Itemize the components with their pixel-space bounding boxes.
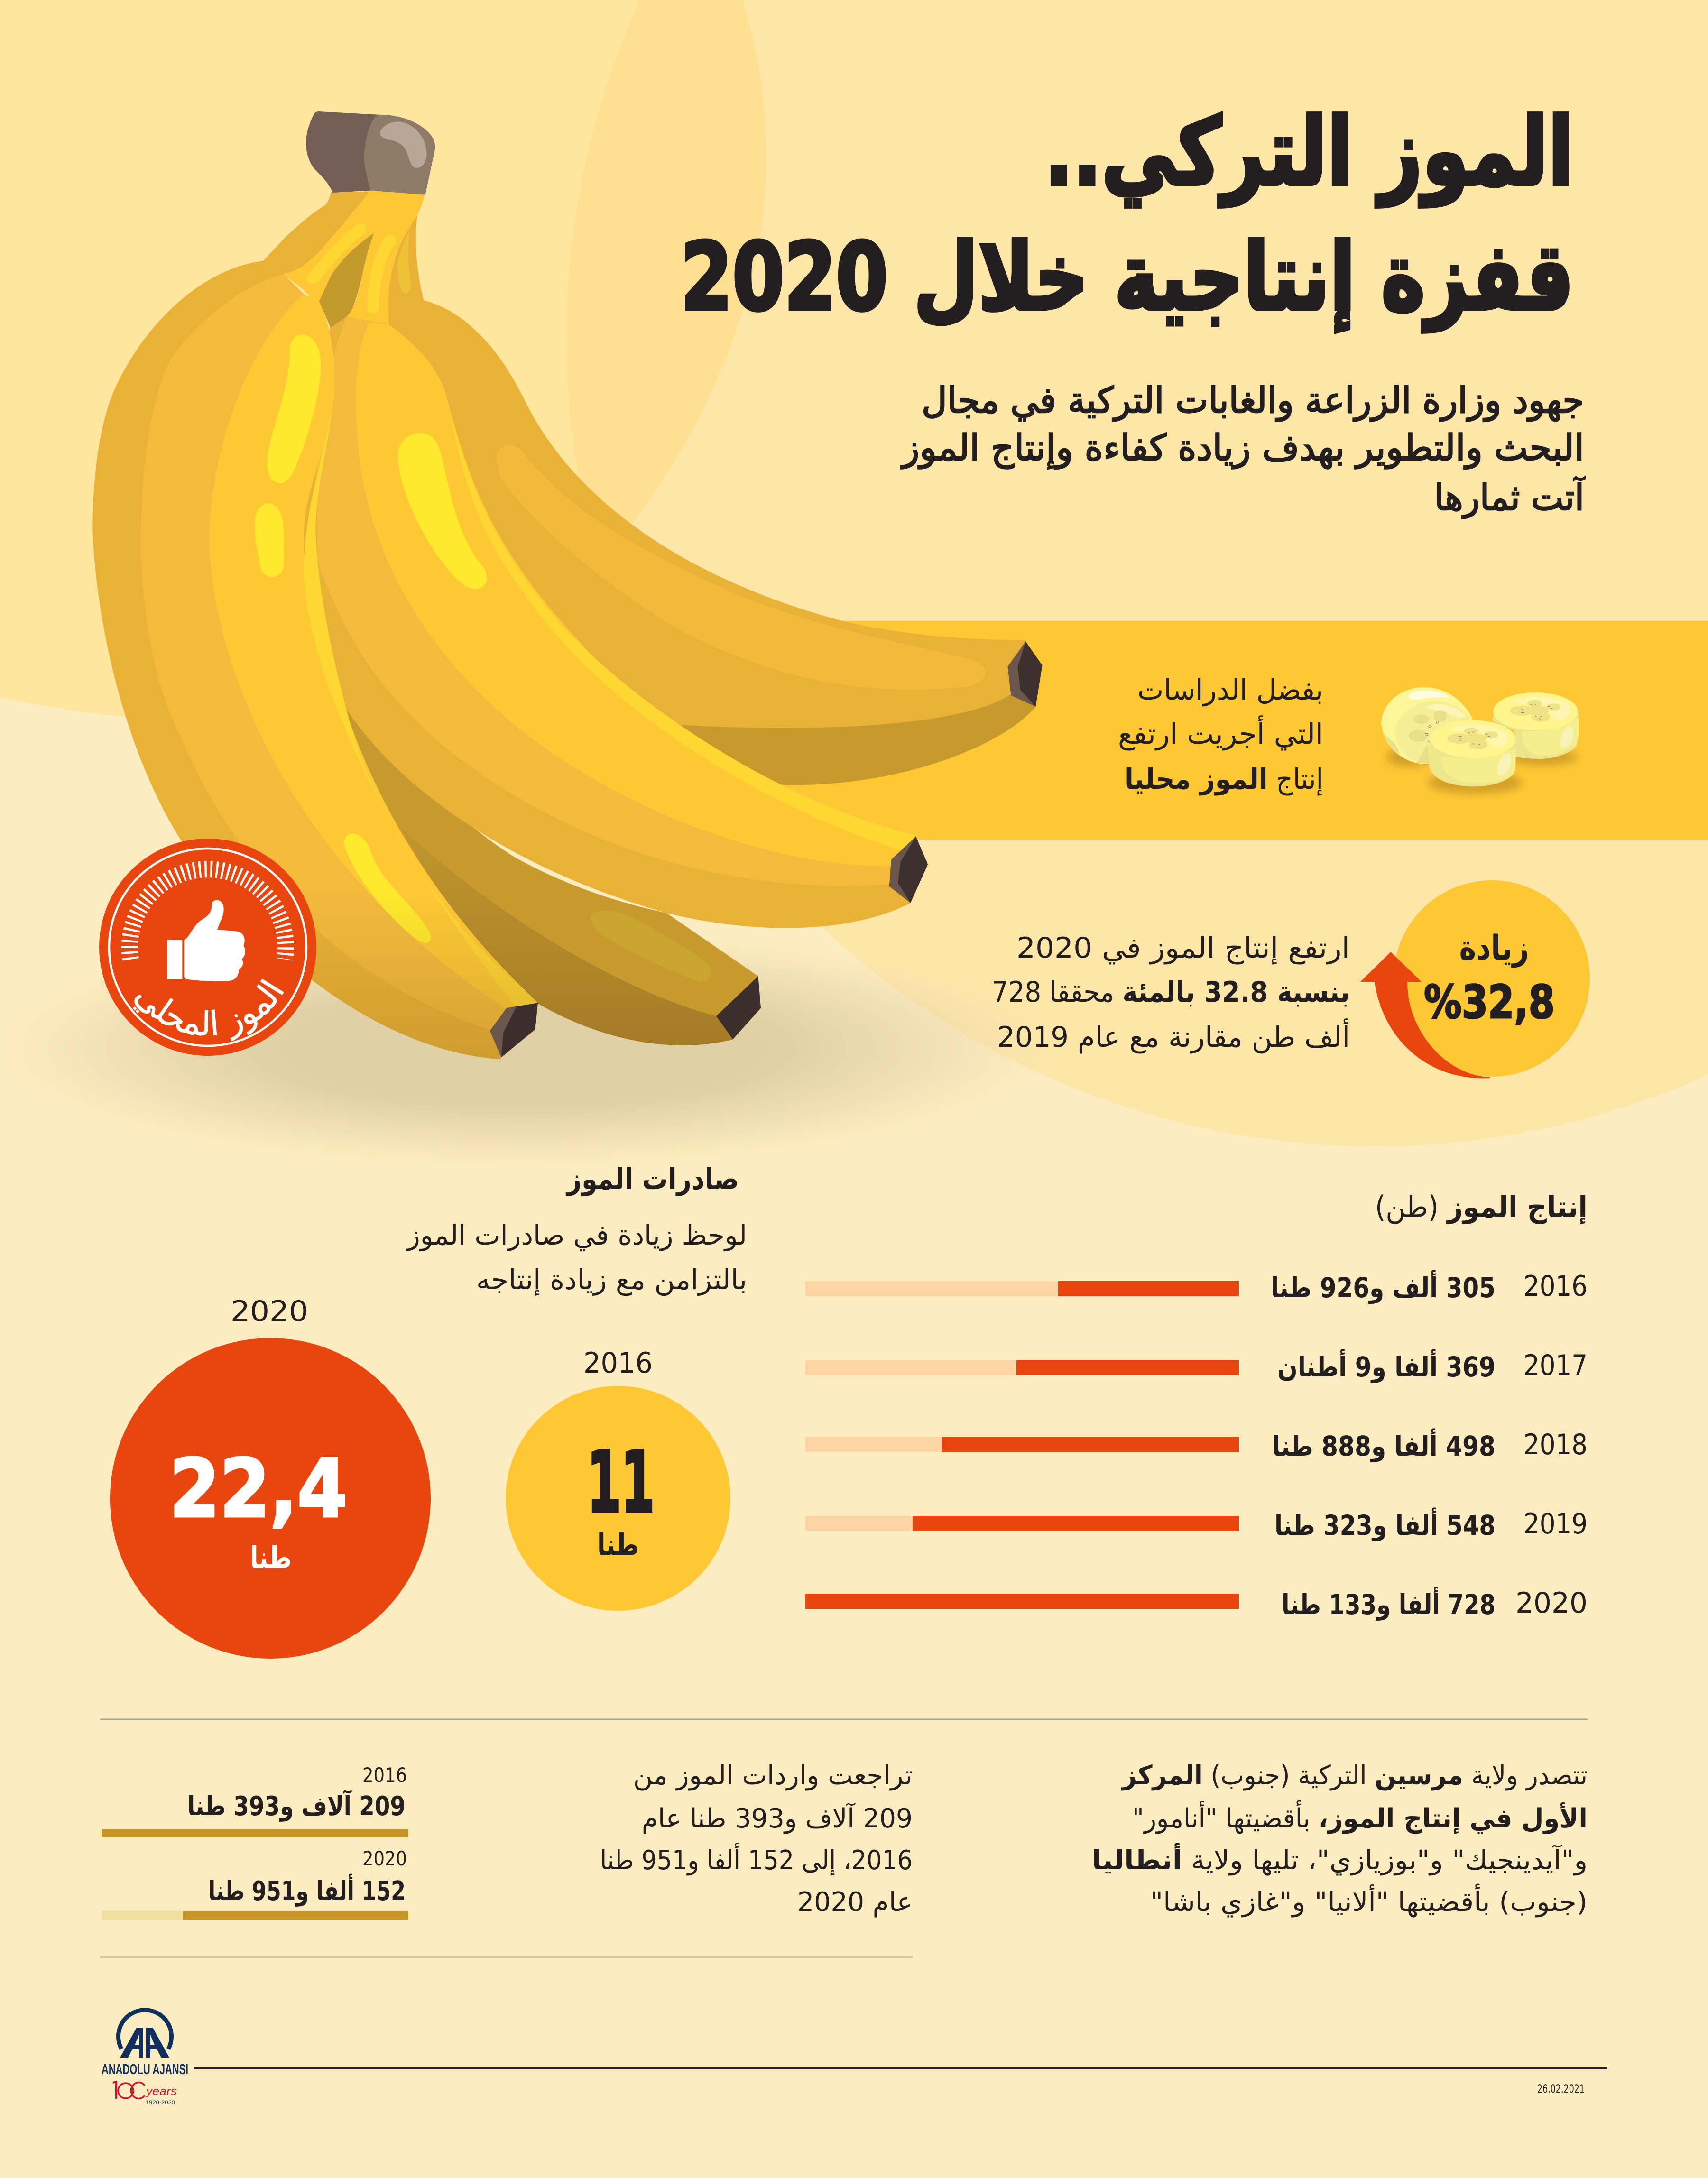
middle banana [300,317,928,928]
chart: imports: 2020 [362,1847,407,1870]
illustration: banana bunch [314,271,1042,1045]
circle: exports 2016: 11 [587,1433,655,1531]
icon: banana slices [1381,687,1579,794]
paragraph: increase [992,932,1350,1054]
circle: exports 2016: 2016 [583,1347,653,1380]
badge text: الموز المحلي [126,970,294,1047]
circle: exports 2020 [110,1295,431,1659]
row 2017: 369 ألفا و9 أطنان [1277,1349,1496,1384]
chart heading: إنتاج الموز (طن) [1375,1190,1588,1224]
divider [100,1956,913,1958]
row 2020 [805,1587,1588,1621]
centre slice [1429,720,1516,786]
left banana [92,261,538,1059]
back banana [389,271,1042,785]
icon: thumbs up [167,900,245,981]
exports text: بالتزامن مع زيادة إنتاجه [476,1264,747,1296]
paragraph: imports: تراجعت واردات الموز من [633,1760,913,1791]
band text: بفضل الدراسات [1137,674,1323,707]
badge: local banana [99,839,316,1056]
row 2019: 548 ألفا و323 طنا [1274,1507,1496,1542]
left slice [1381,687,1473,764]
band text: إنتاج الموز محليا [1125,763,1323,796]
paragraph: increase: ألف طن مقارنة مع عام 2019 [997,1018,1350,1054]
background [0,0,1708,1146]
paragraph: imports: 2016، إلى 152 ألفا و951 طنا [600,1843,913,1876]
paragraph: imports: 209 آلاف و393 طنا عام [642,1802,913,1834]
row 2017: 2017 [1523,1349,1588,1382]
footer line [194,2067,1607,2069]
row 2018 [805,1428,1588,1463]
chart: banana production [805,1190,1588,1621]
exports text: صادرات الموز [565,1162,739,1196]
subtitle: البحث والتطوير بهدف زيادة كفاءة وإنتاج الموز [900,426,1584,469]
chart: imports: 209 آلاف و393 طنا [187,1790,406,1822]
paragraph: mersin [1092,1760,1588,1918]
title: الموز التركي.. [1044,98,1574,207]
row 2016: 305 ألف و926 طنا [1271,1270,1496,1304]
increase percent: %32,8 [1424,976,1555,1029]
circle: exports 2020: 2020 [231,1295,308,1328]
paragraph: mersin: الأول في إنتاج الموز، بأقضيتها "أنامور" [1132,1800,1588,1834]
paragraph: mersin: و"آيدينجيك" و"بوزيازي"، تليها ولاية أنطاليا [1092,1843,1588,1876]
logo: Anadolu Agency: years [145,2085,177,2098]
date: 26.02.2021 [1537,2082,1585,2095]
right slice [1493,692,1579,759]
row 2016 [805,1270,1588,1304]
row 2020: 728 ألفا و133 طنا [1282,1587,1496,1621]
row 2019 [805,1507,1588,1542]
row 2017 [805,1349,1588,1384]
slice shadows [1386,748,1578,794]
paragraph: mersin: تتصدر ولاية مرسين التركية (جنوب) المركز [1121,1760,1588,1791]
divider [100,1719,1588,1720]
chart: imports [102,1763,408,1920]
logo: Anadolu Agency [102,2010,188,2105]
row 2018: 498 ألفا و888 طنا [1272,1428,1496,1463]
paragraph: imports: عام 2020 [797,1887,913,1918]
arrow [1360,952,1490,1078]
circle: exports 2016 [506,1347,730,1611]
row 2020: 2020 [1515,1587,1588,1620]
subtitle: جهود وزارة الزراعة والغابات التركية في مجال [922,379,1584,422]
increase label: زيادة [1459,928,1529,968]
exports text: لوحظ زيادة في صادرات الموز [406,1219,747,1252]
circle: exports 2020: طنا [250,1541,292,1576]
chart: imports: 2016 [362,1763,407,1787]
logo: Anadolu Agency: 1920-2020 [146,2100,175,2105]
exports text [406,1162,747,1296]
subtitle [900,379,1586,519]
banana stem cap [306,111,435,195]
row 2016: 2016 [1523,1270,1588,1303]
band text: التي أجريت ارتفع [1118,715,1323,751]
bottom banana [314,657,761,1045]
paragraph: increase: بنسبة 32.8 بالمئة محققا 728 [992,976,1350,1009]
band text [1118,674,1323,796]
row 2018: 2018 [1523,1428,1588,1461]
circle: exports 2020: 22,4 [170,1442,347,1535]
paragraph: imports [600,1760,913,1918]
title [681,98,1574,332]
row 2019: 2019 [1523,1507,1588,1541]
subtitle: آتت ثمارها [1434,476,1586,519]
logo: Anadolu Agency: ANADOLU AJANSI [102,2061,188,2077]
banana neck [262,191,485,341]
ground shadow [0,930,1053,1167]
bananas: middle and left [92,261,928,1059]
chart: imports: 152 ألفا و951 طنا [208,1873,406,1907]
circle: exports 2016: طنا [597,1528,639,1563]
circle: increase [1360,880,1590,1078]
paragraph: mersin: (جنوب) بأقضيتها "ألانيا" و"غازي باشا" [1150,1883,1588,1918]
yellow band [711,621,1708,840]
paragraph: increase: ارتفع إنتاج الموز في 2020 [1016,932,1350,965]
